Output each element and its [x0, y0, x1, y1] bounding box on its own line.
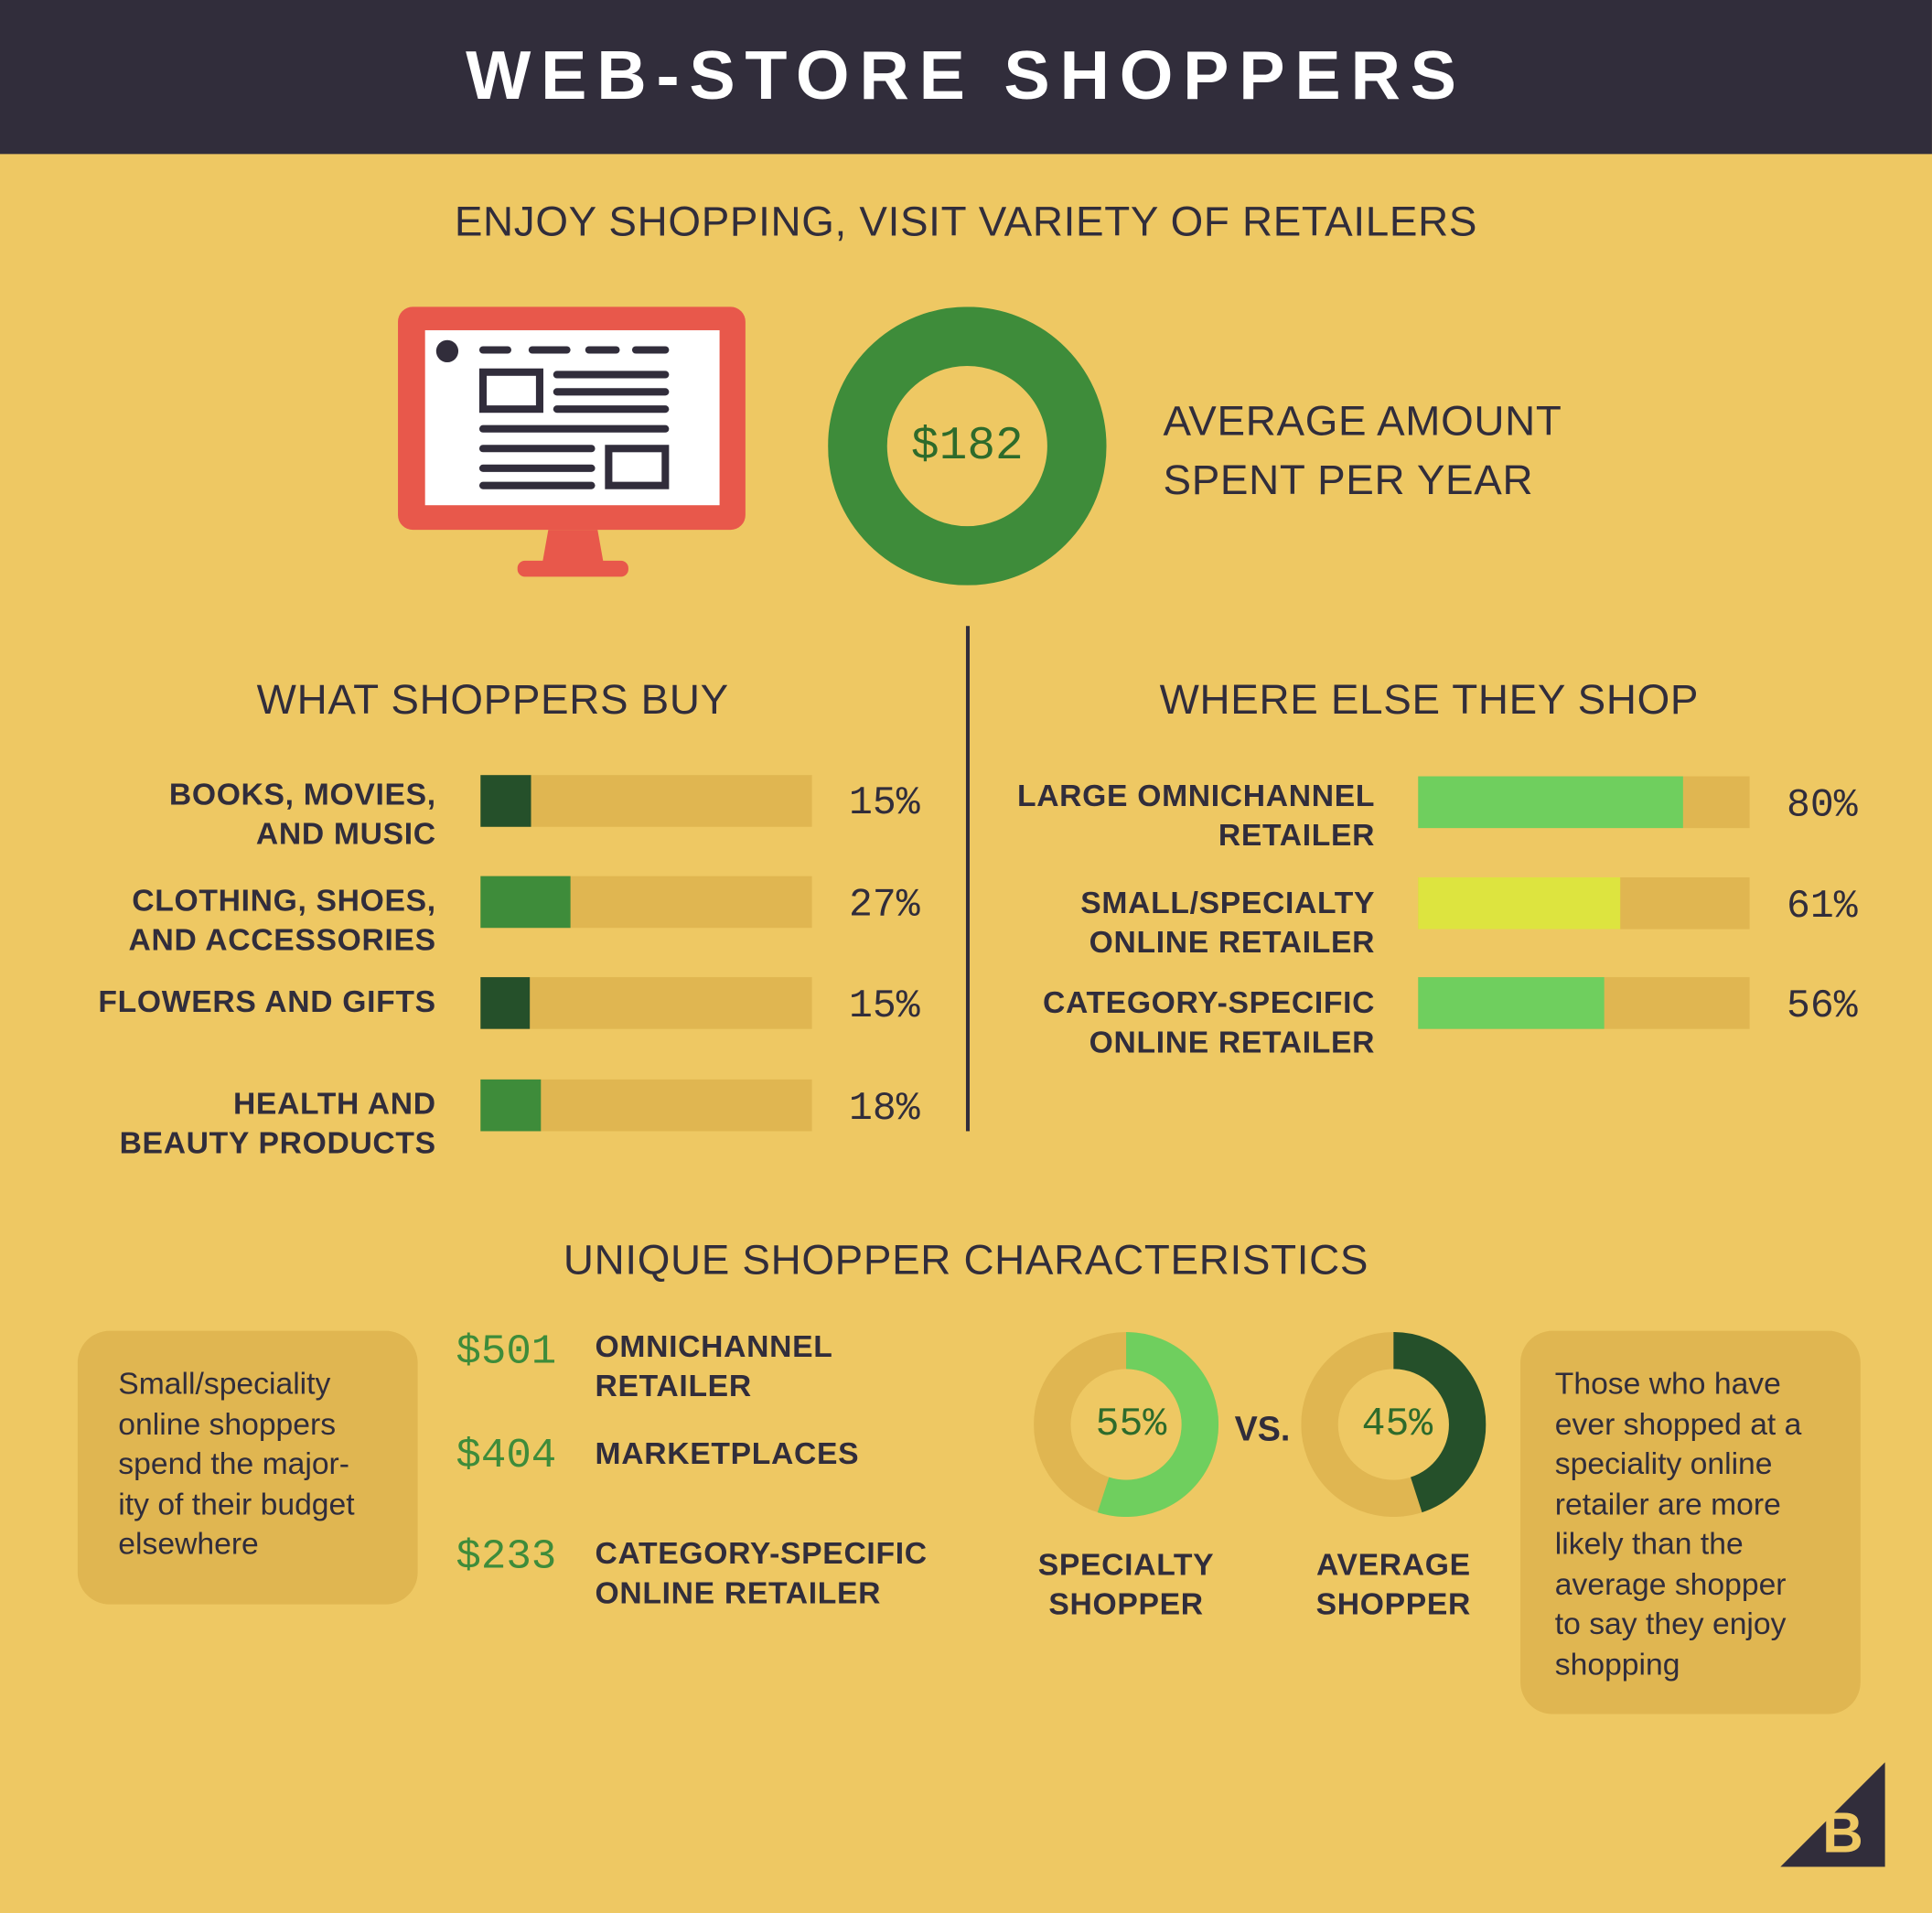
icon: logo [1780, 1762, 1885, 1866]
spend list: $404 [456, 1433, 556, 1480]
panel: what shoppers buy: CLOTHING, SHOES, [132, 884, 436, 918]
callout: left box: online shoppers [118, 1406, 336, 1441]
callout: right box: retailer are more [1555, 1487, 1781, 1521]
spend list: $501 [456, 1329, 556, 1376]
callout: right box: shopping [1555, 1647, 1680, 1682]
panel: where else they shop: 56% [1787, 983, 1858, 1029]
panel: what shoppers buy: 27% [849, 882, 920, 928]
callout: left box: Small/speciality [118, 1367, 330, 1401]
callout: right box: likely than the [1555, 1527, 1744, 1562]
panel: what shoppers buy: FLOWERS AND GIFTS [98, 984, 436, 1019]
callout: left box: spend the major- [118, 1446, 349, 1481]
heading: WHAT SHOPPERS BUY [257, 676, 729, 724]
spend list: RETAILER [596, 1369, 752, 1403]
callout: right box: speciality online [1555, 1446, 1773, 1481]
panel: where else they shop: LARGE OMNICHANNEL [1017, 779, 1375, 813]
donut: specialty shopper 55%: SPECIALTY [1038, 1548, 1214, 1582]
donut: average shopper 45%: 45% [1362, 1401, 1433, 1446]
panel: where else they shop: 80% [1787, 782, 1858, 828]
panel: what shoppers buy: 15% [849, 780, 920, 825]
spend list: $233 [456, 1534, 556, 1581]
donut: specialty shopper 55%: SHOPPER [1048, 1587, 1204, 1622]
average amount text [1163, 398, 1562, 504]
panel: what shoppers buy [98, 676, 920, 1161]
donut: average shopper 45% [1301, 1332, 1486, 1622]
spend list: MARKETPLACES [596, 1436, 859, 1471]
panel: what shoppers buy: HEALTH AND [233, 1087, 436, 1122]
vs label: VS. [1235, 1410, 1290, 1448]
donut: specialty shopper 55% [1034, 1332, 1218, 1622]
donut: $182: $182 [911, 420, 1024, 473]
subtitle: ENJOY SHOPPING, VISIT VARIETY OF RETAILERS [455, 199, 1477, 245]
callout: right box: average shopper [1555, 1567, 1787, 1601]
panel: what shoppers buy: 18% [849, 1086, 920, 1131]
callout: right box: ever shopped at a [1555, 1406, 1801, 1441]
heading: WHERE ELSE THEY SHOP [1160, 676, 1699, 724]
icon: monitor [398, 306, 746, 576]
panel: where else they shop: 61% [1787, 884, 1858, 930]
spend list: ONLINE RETAILER [596, 1576, 881, 1610]
heading: unique shopper characteristics: UNIQUE SHOPPER CHARACTERISTICS [564, 1237, 1368, 1284]
callout: left box: elsewhere [118, 1527, 259, 1562]
panel: what shoppers buy: BOOKS, MOVIES, [169, 778, 436, 812]
average amount text: AVERAGE AMOUNT [1163, 398, 1562, 445]
callout: right box [1520, 1331, 1861, 1714]
panel: what shoppers buy: 15% [849, 983, 920, 1029]
panel: where else they shop: RETAILER [1218, 818, 1375, 853]
panel: where else they shop: SMALL/SPECIALTY [1080, 886, 1375, 920]
icon: logo: B [1822, 1800, 1863, 1865]
panel: what shoppers buy: AND MUSIC [256, 817, 436, 852]
panel: where else they shop: ONLINE RETAILER [1089, 926, 1375, 960]
donut: average shopper 45%: SHOPPER [1316, 1587, 1471, 1622]
panel: where else they shop: CATEGORY-SPECIFIC [1043, 986, 1375, 1020]
callout: right box: to say they enjoy [1555, 1607, 1786, 1641]
callout: right box: Those who have [1555, 1367, 1781, 1401]
spend list [456, 1329, 928, 1610]
panel: what shoppers buy: BEAUTY PRODUCTS [120, 1126, 436, 1161]
panel: what shoppers buy: AND ACCESSORIES [129, 923, 436, 958]
donut: average shopper 45%: AVERAGE [1316, 1548, 1471, 1582]
panel: where else they shop [1017, 676, 1858, 1059]
donut: specialty shopper 55%: 55% [1096, 1401, 1166, 1446]
average amount text: SPENT PER YEAR [1163, 457, 1533, 504]
header bar [0, 0, 1932, 154]
panel: where else they shop: ONLINE RETAILER [1089, 1026, 1375, 1059]
spend list: OMNICHANNEL [596, 1329, 833, 1364]
callout: left box [78, 1331, 418, 1605]
donut: $182 [828, 306, 1107, 586]
title: WEB-STORE SHOPPERS [466, 36, 1466, 113]
callout: left box: ity of their budget [118, 1487, 355, 1521]
spend list: CATEGORY-SPECIFIC [596, 1537, 928, 1571]
